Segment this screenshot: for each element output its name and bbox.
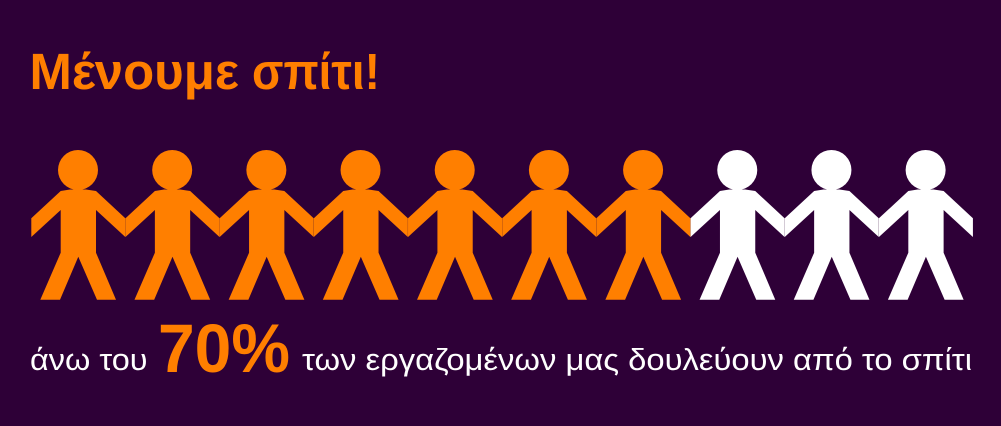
person 1: orange xyxy=(31,150,125,300)
title xyxy=(30,43,380,100)
person 5: orange xyxy=(408,150,502,300)
row of people holding hands xyxy=(31,150,973,300)
person 6: orange xyxy=(502,150,596,300)
person 7: orange xyxy=(596,150,690,300)
caption: remaining text: των εργαζομένων μας δουλεύουν από το σπίτι xyxy=(302,342,972,377)
title: σπίτι! xyxy=(252,43,380,100)
caption: 70% statistic: 70% xyxy=(158,310,290,387)
person 2: orange xyxy=(125,150,219,300)
title: Μένουμε xyxy=(30,43,239,100)
person 9: white xyxy=(785,150,879,300)
person 10: white xyxy=(879,150,973,300)
person 3: orange xyxy=(220,150,314,300)
person 8: white xyxy=(691,150,785,300)
caption: lead-in text: άνω του xyxy=(30,342,148,377)
person 4: orange xyxy=(314,150,408,300)
